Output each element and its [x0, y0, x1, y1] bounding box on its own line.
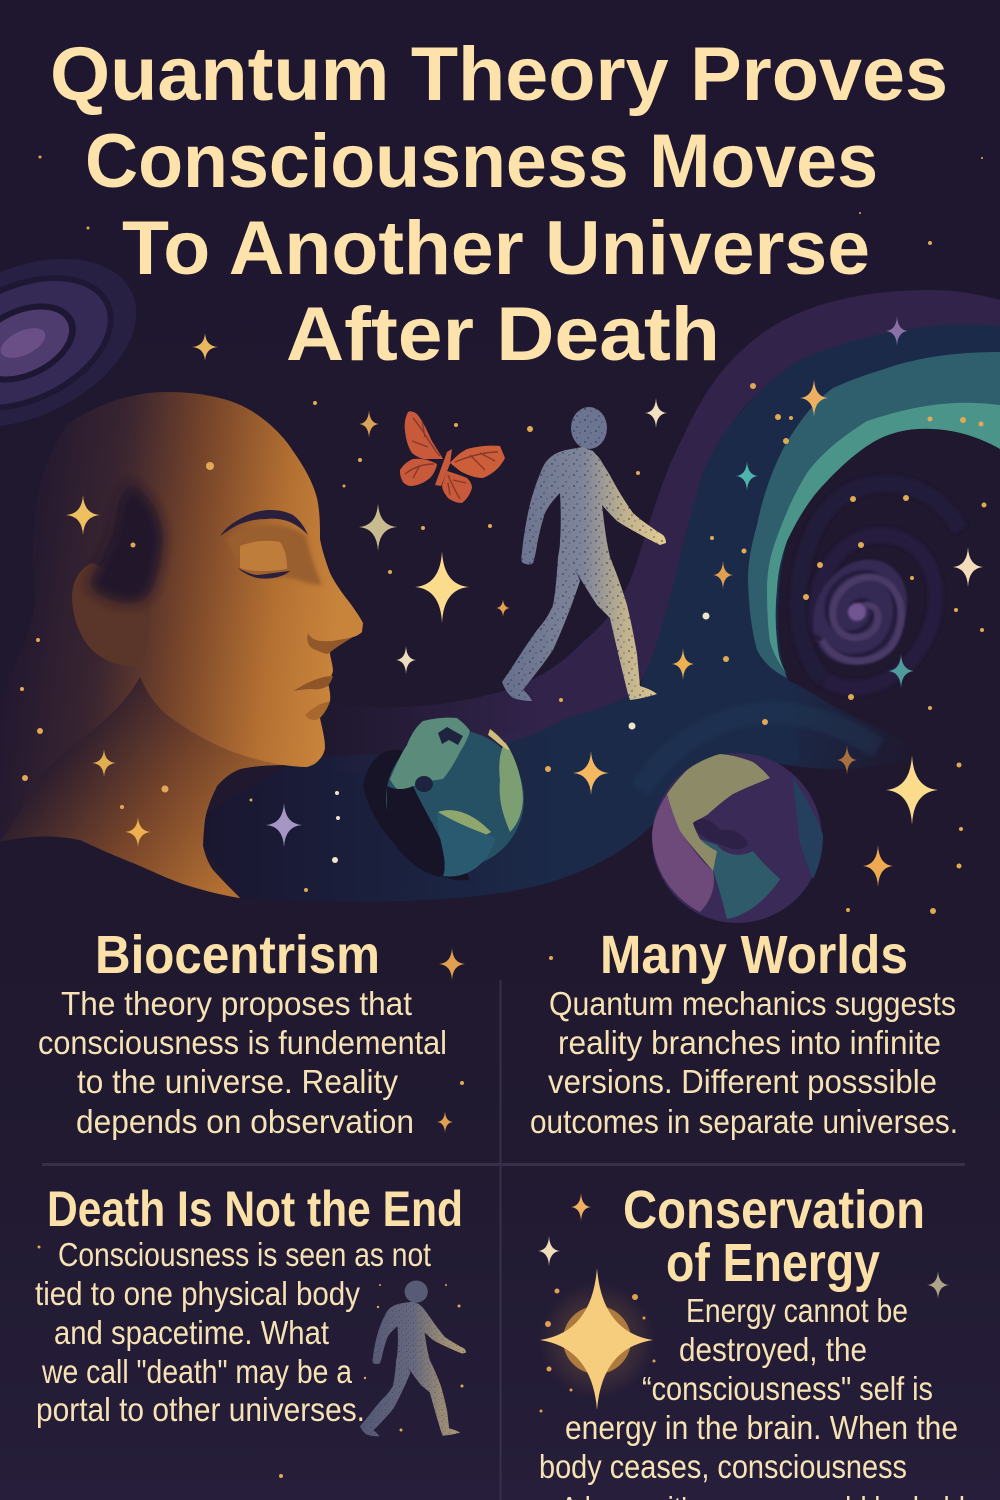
panel: Death Is Not the End [35, 1181, 463, 1428]
panel: Death Is Not the End: tied to one physical body [35, 1275, 360, 1312]
illustration: butterfly [400, 411, 505, 503]
illustration: top-left spiral galaxy [0, 225, 163, 461]
title: Consciousness Moves [85, 119, 878, 204]
panel: Conservation of Energy: body ceases, consciousness [539, 1448, 907, 1485]
panel: Conservation of Energy: Energy cannot be [686, 1292, 908, 1329]
panel: Many Worlds: Many Worlds [600, 925, 908, 985]
eye socket [226, 525, 322, 585]
illustration: cosmic wave bands [203, 290, 1000, 902]
title: To Another Universe [122, 206, 870, 291]
panel: Conservation of Energy [539, 1180, 965, 1500]
dividers [42, 980, 965, 1500]
panel: Many Worlds [530, 925, 958, 1140]
panel: Conservation of Energy: of Energy [666, 1233, 880, 1293]
panel: Death Is Not the End: Consciousness is seen as not [58, 1236, 431, 1273]
panel: Biocentrism: consciousness is fundemental [38, 1024, 447, 1061]
closed eye [238, 568, 290, 579]
panel: Death Is Not the End: portal to other universes. [36, 1391, 365, 1428]
panel: Conservation of Energy: energy in the brain. When the [565, 1409, 958, 1446]
ear [72, 563, 151, 666]
panel: Death Is Not the End: and spacetime. What [54, 1314, 329, 1351]
icon: glowing star [539, 1268, 656, 1412]
title: After Death [286, 292, 720, 377]
illustration: sparkle stars [66, 316, 983, 1299]
panel: Biocentrism: depends on observation [76, 1103, 414, 1140]
icon: small walking figure [360, 1281, 466, 1436]
panel: Biocentrism: The theory proposes that [61, 985, 412, 1022]
panel: Death Is Not the End: we call "death" may be a [41, 1353, 353, 1390]
illustration: right earth [652, 753, 823, 923]
panel: Many Worlds: versions. Different posssible [548, 1063, 937, 1100]
title [50, 32, 948, 377]
panel: Conservation of Energy: “consciousness" self is [642, 1370, 933, 1407]
neck shading [0, 677, 283, 898]
illustration: head profile [0, 392, 363, 898]
panel: Many Worlds: Quantum mechanics suggests [549, 985, 956, 1022]
panel: Biocentrism: Biocentrism [95, 925, 380, 985]
dark hair shadow [88, 482, 163, 603]
panel: Many Worlds: reality branches into infinite [558, 1024, 941, 1061]
eyebrow [220, 510, 308, 536]
illustration: left earth [363, 718, 524, 880]
illustration: walking figure [502, 407, 666, 701]
eyelid [240, 541, 287, 571]
panel: Death Is Not the End: Death Is Not the End [47, 1181, 463, 1237]
panel: Biocentrism: to the universe. Reality [77, 1063, 398, 1100]
title: Quantum Theory Proves [50, 32, 948, 117]
illustration: right spiral galaxy [794, 484, 960, 688]
panel: Many Worlds: outcomes in separate universes. [530, 1103, 958, 1140]
lips [293, 676, 333, 691]
panel: Biocentrism [38, 925, 447, 1140]
panel: Conservation of Energy: destroyed, the [679, 1331, 867, 1368]
nose shadow [307, 633, 353, 654]
panel: Conservation of Energy: Conservation [623, 1180, 925, 1240]
